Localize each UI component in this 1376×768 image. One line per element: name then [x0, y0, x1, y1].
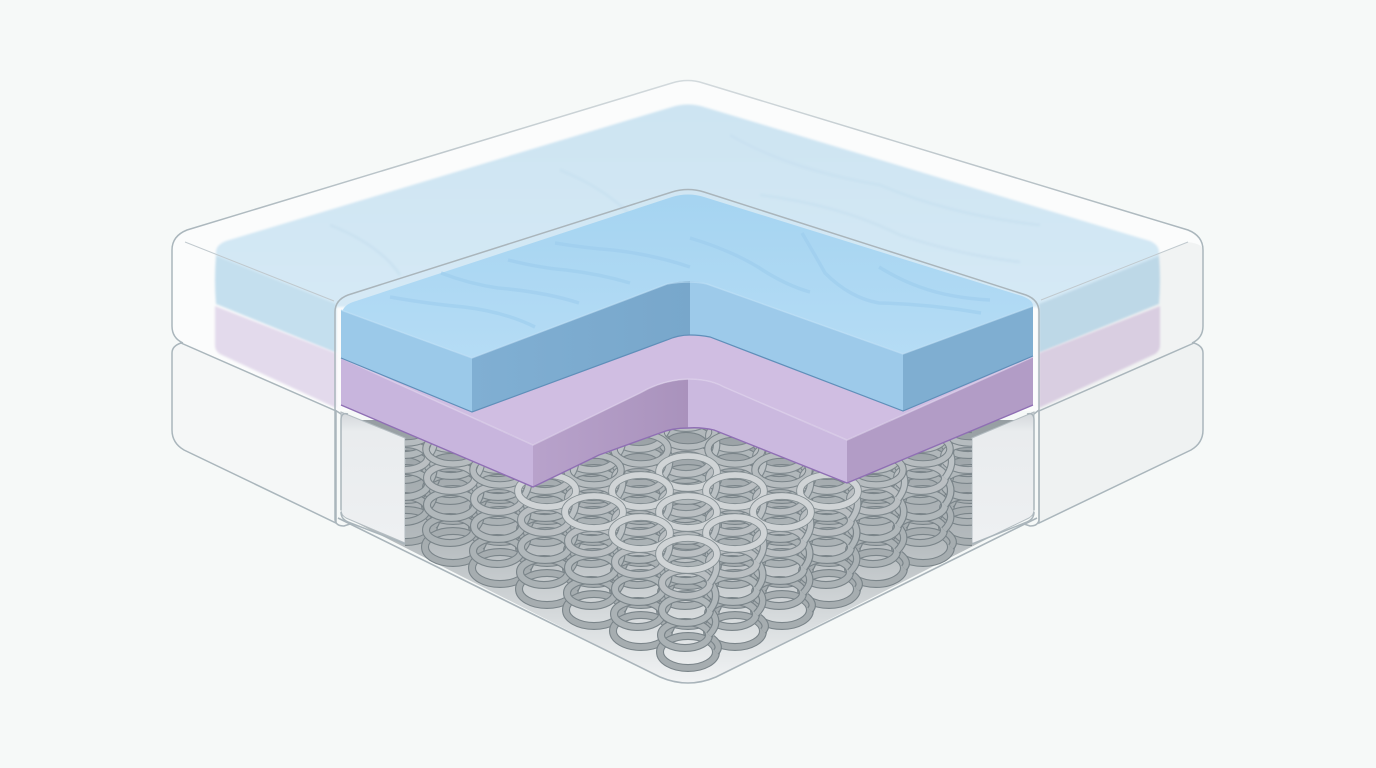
- blue foam layer: [341, 194, 1033, 412]
- right inner support wall: [972, 412, 1034, 543]
- purple inner right face: [688, 379, 847, 483]
- blue bottom edge: [341, 335, 1033, 412]
- purple inner left face: [533, 379, 690, 487]
- faded lower foam layer seen through cover: [215, 306, 1160, 408]
- purple left outer face: [341, 358, 533, 487]
- transparent outer cover: lower left section: [172, 343, 336, 523]
- left inner support wall: [341, 412, 405, 543]
- purple top surface: [341, 300, 1033, 445]
- transparent outer cover: upper section: [172, 80, 1203, 411]
- faded upper foam layer seen through cover: [215, 104, 1160, 353]
- floor edge outline: [338, 518, 1037, 683]
- surface waves: [390, 233, 990, 327]
- purple foam layer: [341, 300, 1033, 487]
- purple edge highlights: [341, 357, 1033, 445]
- coil springs grid: [378, 371, 1000, 668]
- blue top surface: [341, 194, 1033, 358]
- blue inner left face: [472, 281, 690, 412]
- illustration: mattress cutaway: [171, 80, 1204, 684]
- cutaway floor panel: [341, 420, 1034, 684]
- cover corner fold lines: [185, 242, 1188, 301]
- purple right outer face: [847, 357, 1033, 483]
- blue right outer face: [903, 306, 1033, 411]
- cutaway window frame: [335, 190, 1039, 544]
- blue inner right face: [690, 281, 903, 411]
- blue edge highlights: [341, 282, 1033, 358]
- purple bottom edge: [341, 405, 1033, 487]
- transparent outer cover: lower right section: [1039, 343, 1203, 523]
- blue left outer face: [341, 310, 472, 412]
